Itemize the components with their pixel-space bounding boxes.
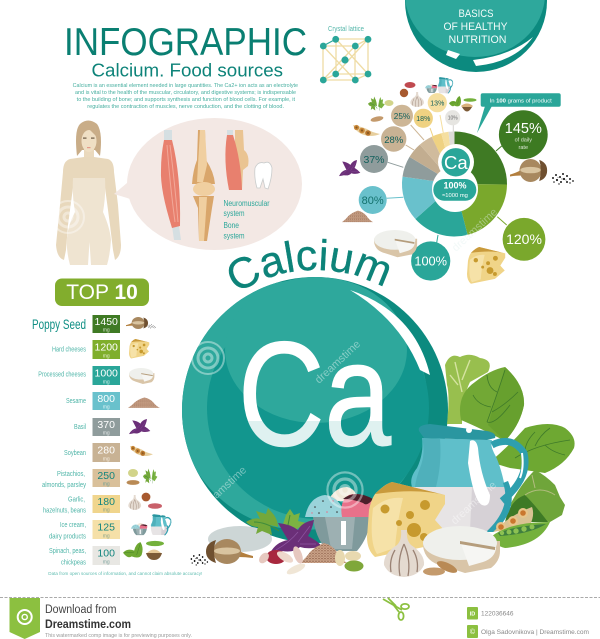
label: neuromuscular system: system bbox=[224, 208, 244, 218]
stat bubble: 18%: 18% bbox=[416, 116, 430, 123]
icon: basil bbox=[339, 160, 360, 176]
stat bubble: 13% bbox=[428, 93, 447, 112]
badge: basics of healthy nutrition: BASICS bbox=[458, 8, 494, 20]
stat bubble: 37%: 37% bbox=[363, 154, 385, 166]
food: sesame pile bbox=[300, 543, 347, 563]
icon: muscle and bone joint bbox=[225, 130, 248, 190]
donut centre: 100% = 1000 mg bbox=[433, 179, 476, 201]
icons: pistachios, almonds, parsley bbox=[368, 97, 394, 123]
footer: author credit bbox=[467, 625, 589, 638]
ranking row 7: pistachios, almonds, parsley: almonds, parsley bbox=[42, 480, 86, 489]
icon: knee bone bbox=[192, 130, 215, 241]
food: soft cheese wheel bbox=[423, 526, 500, 573]
stat bubble: 25% bbox=[391, 105, 413, 127]
icon: muscle bbox=[161, 130, 181, 240]
footer: author credit: Olga Sadovnikova | Dreamstime.com bbox=[481, 629, 589, 636]
food: almonds bbox=[423, 559, 459, 576]
ranking row 5: basil bbox=[74, 418, 150, 436]
ranking row 10: spinach, peas, chickpeas: Spinach, peas, bbox=[49, 546, 86, 555]
badge: basics of healthy nutrition: OF HEALTHY bbox=[444, 21, 508, 33]
shadow under poppy bbox=[208, 526, 272, 552]
footer divider bbox=[0, 596, 600, 598]
stat bubble: 28% bbox=[381, 126, 406, 152]
watermarks: dreamstime bbox=[199, 464, 249, 512]
watermarks: dreamstime bbox=[449, 479, 499, 527]
badge: basics of healthy nutrition: NUTRITION bbox=[448, 34, 507, 46]
ranking row 6: soybean: 280 bbox=[97, 444, 115, 456]
ranking row 1: poppy seed: mg bbox=[103, 328, 110, 334]
ranking row 2: hard cheeses: 1200 bbox=[95, 342, 118, 354]
footer text: download from dreamstime: Dreamstime.com bbox=[45, 619, 131, 631]
food: pistachios bbox=[335, 550, 364, 572]
title: INFOGRAPHIC bbox=[64, 21, 307, 64]
food: ice cream bowl bbox=[305, 487, 373, 551]
stat bubble: 145%: of daily bbox=[515, 138, 532, 144]
crystal lattice bbox=[320, 24, 371, 83]
stat bubble: 145% bbox=[499, 110, 548, 159]
intro text block: Calcium is an essential element needed in large quantities. The Ca2+ ion acts as an electrolyte bbox=[73, 83, 298, 89]
stat bubble: 10%: 10% bbox=[448, 116, 458, 122]
ranking row 9: ice cream, dairy products bbox=[49, 514, 171, 541]
stat bubble: 100%: 100% bbox=[414, 254, 447, 269]
ranking row 6: soybean bbox=[64, 443, 153, 462]
food: milk jug bbox=[411, 424, 525, 532]
ranking row 3: processed cheeses: Processed cheeses bbox=[38, 370, 86, 379]
label: neuromuscular system: Neuromuscular bbox=[224, 198, 270, 208]
ranking row 2: hard cheeses bbox=[52, 339, 149, 360]
icon: scissors bbox=[383, 598, 409, 620]
ranking row 7: pistachios, almonds, parsley: 250 bbox=[97, 470, 115, 482]
food: beans bbox=[257, 545, 307, 576]
intro text block: and is vital to the health of the muscular, circulatory, and digestive systems; is indispensable bbox=[75, 90, 296, 96]
ranking row 8: garlic, hazelnuts, beans: mg bbox=[103, 508, 110, 514]
food: peas bbox=[492, 522, 550, 548]
icons around donut: poppy seed bbox=[510, 159, 574, 185]
badge: basics of healthy nutrition bbox=[405, 0, 547, 72]
ranking row 3: processed cheeses: mg bbox=[103, 380, 110, 386]
ranking row 2: hard cheeses: mg bbox=[103, 354, 110, 360]
footer: image id: ID bbox=[470, 612, 475, 618]
icons: ice cream and jug bbox=[425, 77, 453, 93]
ranking row 7: pistachios, almonds, parsley: Pistachios, bbox=[57, 469, 85, 478]
ranking row 5: basil: 370 bbox=[97, 419, 115, 431]
stat bubble: 37% bbox=[360, 145, 388, 173]
big calcium sphere bbox=[178, 277, 448, 543]
footer text: download from dreamstime: Download from bbox=[45, 604, 116, 616]
label: bone system bbox=[224, 220, 244, 240]
icon: woman figure bbox=[56, 120, 121, 265]
food: parsley bbox=[246, 508, 306, 535]
intro text block bbox=[73, 83, 298, 110]
ranking row 4: sesame: 800 bbox=[97, 393, 115, 405]
icons: garlic, hazelnuts, beans bbox=[400, 82, 424, 107]
donut centre: 100% = 1000 mg: ≈1000 mg bbox=[442, 193, 468, 199]
footer text: download from dreamstime bbox=[45, 604, 192, 639]
label: bone system: system bbox=[224, 230, 244, 240]
stat bubble: 80%: 80% bbox=[362, 195, 384, 207]
curved heading: Calcium: Calcium bbox=[228, 238, 390, 288]
ranking row 1: poppy seed bbox=[32, 315, 156, 334]
ranking row 8: garlic, hazelnuts, beans: 180 bbox=[97, 496, 115, 508]
callout: in 100 grams of product bbox=[477, 93, 561, 133]
food: spinach leaves bbox=[460, 367, 575, 522]
callout: in 100 grams of product: In 100 grams of product bbox=[490, 98, 552, 104]
donut centre: 100% = 1000 mg: 100% bbox=[443, 181, 467, 191]
watermarks bbox=[52, 201, 500, 527]
food: poppy seeds bbox=[191, 554, 208, 566]
crystal lattice: Crystal lattice bbox=[328, 24, 364, 33]
stat bubble: 145%: 145% bbox=[505, 121, 542, 137]
connector lines bbox=[387, 115, 507, 243]
ranking row 10: spinach, peas, chickpeas: mg bbox=[103, 560, 110, 566]
ranking row 1: poppy seed: Poppy Seed bbox=[32, 317, 86, 332]
label: bone system: Bone bbox=[224, 220, 239, 230]
footer: image id bbox=[467, 607, 514, 620]
ranking row 5: basil: Basil bbox=[74, 422, 86, 431]
ranking row 7: pistachios, almonds, parsley bbox=[42, 469, 157, 489]
watermarks: dreamstime bbox=[450, 206, 500, 254]
footer badge: dreamstime logo bbox=[10, 598, 40, 639]
ranking row 4: sesame bbox=[66, 392, 160, 410]
ranking row 9: ice cream, dairy products: mg bbox=[103, 534, 110, 540]
stat bubble: 120%: 120% bbox=[506, 231, 542, 247]
ranking row 9: ice cream, dairy products: dairy products bbox=[49, 532, 86, 541]
ranking row 9: ice cream, dairy products: Ice cream, bbox=[60, 520, 86, 529]
ranking row 3: processed cheeses bbox=[38, 366, 154, 386]
stat bubble: 28%: 28% bbox=[384, 135, 404, 146]
ranking row 10: spinach, peas, chickpeas: 100 bbox=[97, 548, 115, 560]
label: neuromuscular system bbox=[224, 198, 270, 218]
food: hard cheese wedge bbox=[367, 482, 445, 557]
ranking row 9: ice cream, dairy products: 125 bbox=[97, 522, 115, 534]
stat bubble: 120% bbox=[503, 218, 545, 261]
donut centre: Ca: Ca bbox=[444, 152, 468, 173]
stat bubble: 145%: rate bbox=[519, 145, 528, 151]
ranking row 4: sesame: mg bbox=[103, 404, 110, 410]
food: soybeans bbox=[493, 507, 533, 532]
ranking row 6: soybean: Soybean bbox=[64, 448, 86, 457]
stat bubble: 10% bbox=[445, 110, 460, 125]
icon: sesame pile bbox=[342, 211, 373, 222]
top 10 badge bbox=[55, 278, 149, 306]
food: poppy head bbox=[206, 539, 253, 564]
intro text block: regulates the contraction of muscles, nerve conduction, and the clotting of blood. bbox=[87, 104, 284, 110]
icon: processed cheese bbox=[374, 230, 417, 257]
icons: spinach, peas, chickpeas bbox=[449, 96, 476, 112]
stat bubble: 80% bbox=[359, 186, 387, 214]
icon: tooth bbox=[255, 162, 272, 189]
ranking row 1: poppy seed: 1450 bbox=[95, 316, 118, 328]
ranking row 5: basil: mg bbox=[103, 430, 110, 436]
stat bubble: 100% bbox=[411, 241, 450, 281]
icon: hard cheese bbox=[467, 247, 505, 284]
ranking row 7: pistachios, almonds, parsley: mg bbox=[103, 482, 110, 488]
footer: image id: 122036646 bbox=[481, 610, 514, 618]
ranking row 6: soybean: mg bbox=[103, 456, 110, 462]
stat bubble: 18% bbox=[414, 109, 433, 128]
watermarks: dreamstime bbox=[313, 338, 363, 386]
ranking row 8: garlic, hazelnuts, beans: Garlic, bbox=[68, 495, 85, 504]
speech bubble: body systems bbox=[114, 118, 302, 250]
ranking row 8: garlic, hazelnuts, beans bbox=[43, 493, 162, 515]
ranking row 8: garlic, hazelnuts, beans: hazelnuts, beans bbox=[43, 506, 86, 515]
donut chart: percent of daily rate bbox=[402, 131, 507, 237]
footer: author credit: © bbox=[470, 628, 476, 636]
intro text block: to the building of bone; and supports synthesis and function of blood cells. For example, it bbox=[77, 97, 296, 103]
stat bubble: 13%: 13% bbox=[430, 100, 444, 107]
top 10 badge: TOP 10 bbox=[66, 281, 138, 304]
big Ca symbol: Ca bbox=[238, 312, 392, 477]
disclaimer note: Data from open sources of information, and cannot claim absolute accuracy! bbox=[48, 571, 202, 576]
ranking row 10: spinach, peas, chickpeas: chickpeas bbox=[61, 558, 86, 567]
icon: soybean bbox=[353, 125, 380, 136]
food: basil bbox=[270, 520, 322, 553]
subtitle: Calcium. Food sources bbox=[92, 60, 283, 81]
footer text: download from dreamstime: This watermarked comp image is for previewing purposes only. bbox=[45, 633, 192, 639]
food: lettuce bbox=[445, 355, 490, 424]
ranking row 10: spinach, peas, chickpeas bbox=[49, 541, 164, 567]
stat bubble: 25%: 25% bbox=[394, 112, 410, 121]
ranking row 3: processed cheeses: 1000 bbox=[95, 368, 118, 380]
food: garlic bbox=[384, 530, 424, 577]
ranking row 2: hard cheeses: Hard cheeses bbox=[52, 345, 86, 354]
ranking row 4: sesame: Sesame bbox=[66, 396, 86, 405]
